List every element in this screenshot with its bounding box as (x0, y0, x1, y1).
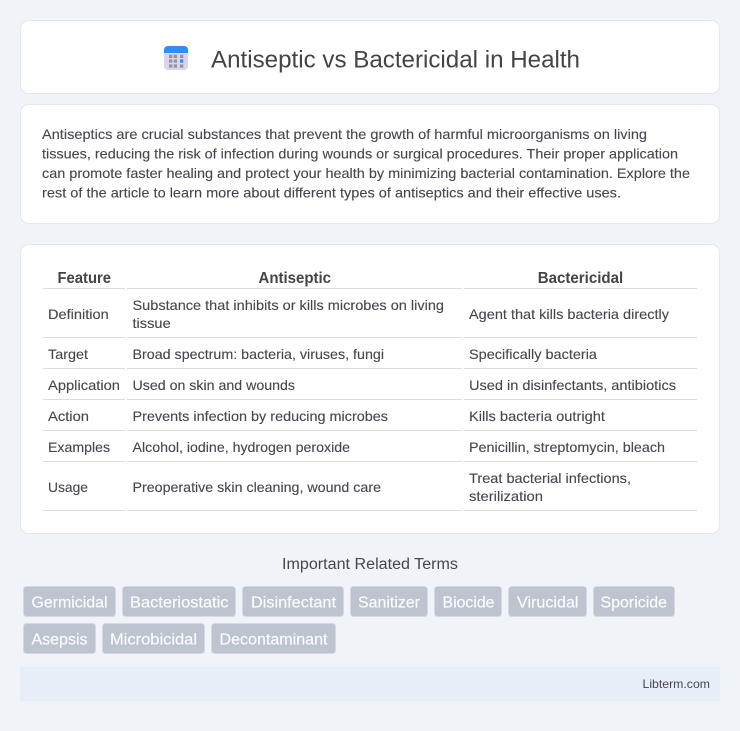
table row: application (48, 377, 676, 393)
footer credit: Libterm.com (642, 677, 710, 691)
tag: Disinfectant: Disinfectant (251, 594, 337, 612)
panel: introduction (20, 104, 720, 224)
panel: comparison table (20, 244, 720, 534)
table row: usage: sterilization (469, 488, 543, 504)
icon: calendar (164, 46, 188, 70)
tag: Sanitizer: Sanitizer (358, 594, 420, 612)
heading: title: Antiseptic vs Bactericidal in Health (211, 46, 580, 74)
tag: Microbicidal: Microbicidal (110, 632, 197, 648)
table row: action: Prevents infection by reducing microbes (132, 408, 388, 424)
footer bar (20, 667, 720, 701)
text block: intro paragraph: Antiseptics are crucial substances that prevent the growth of harmful microorganisms on living (42, 126, 647, 142)
table row: examples: Examples (48, 439, 110, 455)
tag: Disinfectant (242, 586, 344, 616)
tag: Bacteriostatic (122, 586, 236, 616)
tag: Decontaminant (212, 624, 336, 654)
table row: definition: Definition (48, 306, 109, 322)
table row: usage (48, 470, 631, 504)
table row: action: Action (48, 408, 89, 424)
table row: examples: Alcohol, iodine, hydrogen peroxide (132, 439, 350, 455)
table row: examples (48, 439, 665, 455)
panel: title header (20, 20, 720, 94)
tag: Microbicidal (102, 624, 204, 654)
tag: Bacteriostatic: Bacteriostatic (130, 594, 229, 612)
heading: important related terms: Important Related Terms (282, 556, 458, 573)
table header row (58, 270, 623, 287)
table row: target: Broad spectrum: bacteria, viruses, fungi (132, 346, 384, 362)
table row: application: Used on skin and wounds (132, 377, 295, 393)
tag: Sanitizer (350, 586, 428, 616)
table header row: Antiseptic (258, 270, 331, 287)
table row: definition: tissue (132, 315, 171, 331)
table row: application: Application (48, 377, 120, 393)
table row: action (48, 408, 605, 424)
tag: Sporicide: Sporicide (600, 594, 667, 612)
table header row: Feature (58, 270, 111, 287)
table row: target: Specifically bacteria (469, 346, 597, 362)
tag: Decontaminant: Decontaminant (220, 632, 328, 648)
tag list: related terms (24, 586, 674, 654)
table header row: Bactericidal (538, 270, 623, 287)
tag: Germicidal (24, 586, 116, 616)
text block: intro paragraph: tissues, reducing the risk of infection during wounds or surgical procedures. Their proper application (42, 146, 678, 162)
tag: Virucidal: Virucidal (517, 594, 578, 612)
table row: examples: Penicillin, streptomycin, bleach (469, 439, 665, 455)
table row: target (48, 346, 597, 362)
tag: Germicidal: Germicidal (32, 594, 108, 612)
table row: usage: Preoperative skin cleaning, wound care (132, 479, 381, 495)
text block: intro paragraph: rest of the article to learn more about different types of antiseptics and their effective uses. (42, 184, 621, 200)
tag: Asepsis (24, 624, 96, 654)
tag: Virucidal (508, 586, 586, 616)
table row: usage: Usage (48, 479, 88, 495)
tag: Sporicide (594, 586, 674, 616)
tag: Asepsis: Asepsis (32, 632, 88, 648)
table row: target: Target (48, 346, 88, 362)
tag: Biocide (434, 586, 502, 616)
tag: Biocide: Biocide (442, 594, 494, 612)
table row: application: Used in disinfectants, antibiotics (469, 377, 676, 393)
table row: usage: Treat bacterial infections, (469, 470, 631, 486)
table row: definition: Agent that kills bacteria directly (469, 306, 669, 322)
table row: action: Kills bacteria outright (469, 408, 605, 424)
table row: definition: Substance that inhibits or kills microbes on living (132, 297, 444, 313)
text block: intro paragraph: can promote faster healing and protect your health by minimizing bacterial contamination. Explore the (42, 165, 690, 181)
text block: intro paragraph (42, 126, 690, 200)
table row: definition (48, 297, 669, 331)
